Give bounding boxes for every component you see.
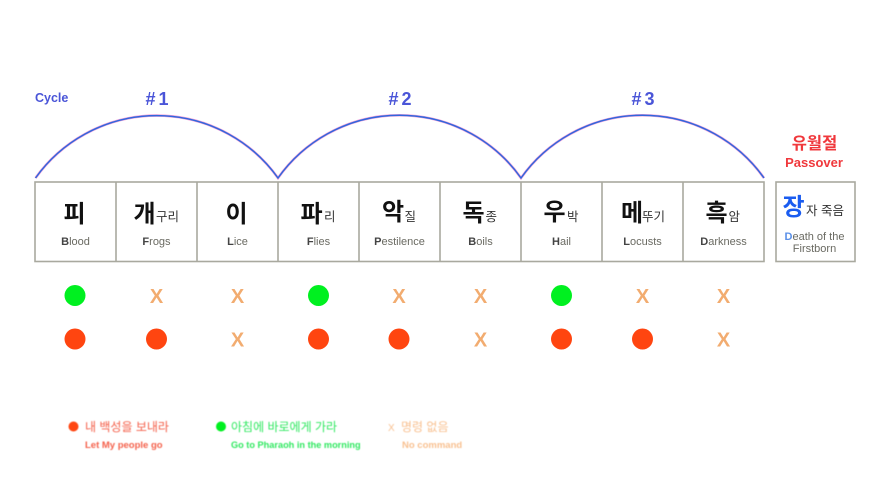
cell: Pestilence: Pestilence — [374, 236, 425, 248]
panel: Death of the Firstborn: Death of the — [785, 231, 844, 243]
row 1 markers: go to Pharaoh in the morning: X — [636, 286, 650, 308]
row 1 markers: go to Pharaoh in the morning: X — [231, 286, 245, 308]
legend: go to Pharaoh in the morning: Go to Pharaoh in the morning — [231, 440, 361, 450]
cell: Flies: Flies — [307, 236, 331, 248]
cell: Frogs: 구리 — [156, 210, 179, 224]
cell: Blood: 피 — [64, 201, 86, 228]
legend: let my people go — [68, 420, 169, 451]
cell: Frogs: 개 — [134, 201, 156, 228]
cell: Locusts: 뚜기 — [642, 210, 665, 224]
legend: no command: 명령 없음 — [401, 420, 448, 434]
row 1 markers: go to Pharaoh in the morning: X — [474, 286, 488, 308]
legend: let my people go: 내 백성을 보내라 — [85, 420, 169, 434]
cell: Darkness: Darkness — [700, 236, 747, 248]
heading: Passover: Passover — [785, 155, 843, 170]
cell: Boils: 종 — [486, 210, 497, 224]
row 1 markers: go to Pharaoh in the morning — [64, 285, 731, 308]
row 1 markers: go to Pharaoh in the morning: X — [392, 286, 406, 308]
cell: Hail: Hail — [552, 236, 571, 248]
row 2 markers: let my people go: X — [231, 330, 245, 352]
cell: Darkness: 암 — [728, 210, 740, 224]
cell: Hail: 박 — [567, 210, 579, 224]
panel: Death of the Firstborn: 자 죽음 — [806, 204, 844, 218]
heading: Passover: 유월절 — [792, 134, 837, 153]
cell: Pestilence: 악 — [382, 199, 404, 226]
cell: Pestilence — [374, 199, 425, 248]
legend: no command: No command — [402, 440, 462, 451]
cell: Darkness — [700, 200, 747, 248]
cell: Boils: Boils — [468, 236, 493, 248]
legend: no command — [388, 420, 462, 451]
cycle number 1: # 1 — [145, 89, 169, 109]
cell: Lice: 이 — [226, 201, 248, 228]
cell: Locusts: 메 — [621, 200, 643, 227]
panel: Death of the Firstborn: 장 — [782, 194, 805, 221]
cell: Locusts — [621, 200, 665, 248]
row 2 markers: let my people go: X — [717, 330, 731, 352]
cell: Blood: Blood — [61, 236, 90, 248]
legend: no command: X — [388, 423, 395, 434]
cell: Flies — [300, 201, 336, 248]
heading: Passover — [785, 134, 843, 170]
panel: Death of the Firstborn: Firstborn — [793, 243, 836, 255]
legend: go to Pharaoh in the morning — [216, 420, 361, 450]
cell: Hail — [544, 199, 579, 248]
cycle arcs — [36, 115, 764, 178]
panel: Death of the Firstborn — [776, 182, 855, 262]
cell: Boils — [462, 200, 497, 248]
cell: Boils: 독 — [462, 200, 485, 227]
legend: let my people go: Let My people go — [85, 440, 163, 451]
cycle number 3: # 3 — [631, 89, 655, 109]
cell: Flies: 파 — [300, 201, 323, 228]
label: Cycle: Cycle — [35, 91, 68, 105]
cell: Lice: Lice — [227, 236, 248, 248]
cell: Frogs: Frogs — [142, 236, 171, 248]
cell: Blood — [61, 201, 90, 248]
cell: Frogs — [134, 201, 179, 248]
row 1 markers: go to Pharaoh in the morning: X — [150, 286, 164, 308]
plague table — [35, 182, 764, 262]
cell: Darkness: 흑 — [706, 200, 728, 227]
legend: go to Pharaoh in the morning: 아침에 바로에게 가라 — [231, 420, 337, 434]
cell: Hail: 우 — [544, 199, 566, 226]
cell: Lice — [226, 201, 248, 248]
cell: Pestilence: 질 — [404, 210, 416, 224]
cell: Locusts: Locusts — [623, 236, 662, 248]
row 2 markers: let my people go — [64, 328, 731, 352]
row 1 markers: go to Pharaoh in the morning: X — [717, 286, 731, 308]
cycle number 2: # 2 — [388, 89, 412, 109]
cell: Flies: 리 — [324, 210, 336, 224]
row 2 markers: let my people go: X — [474, 330, 488, 352]
